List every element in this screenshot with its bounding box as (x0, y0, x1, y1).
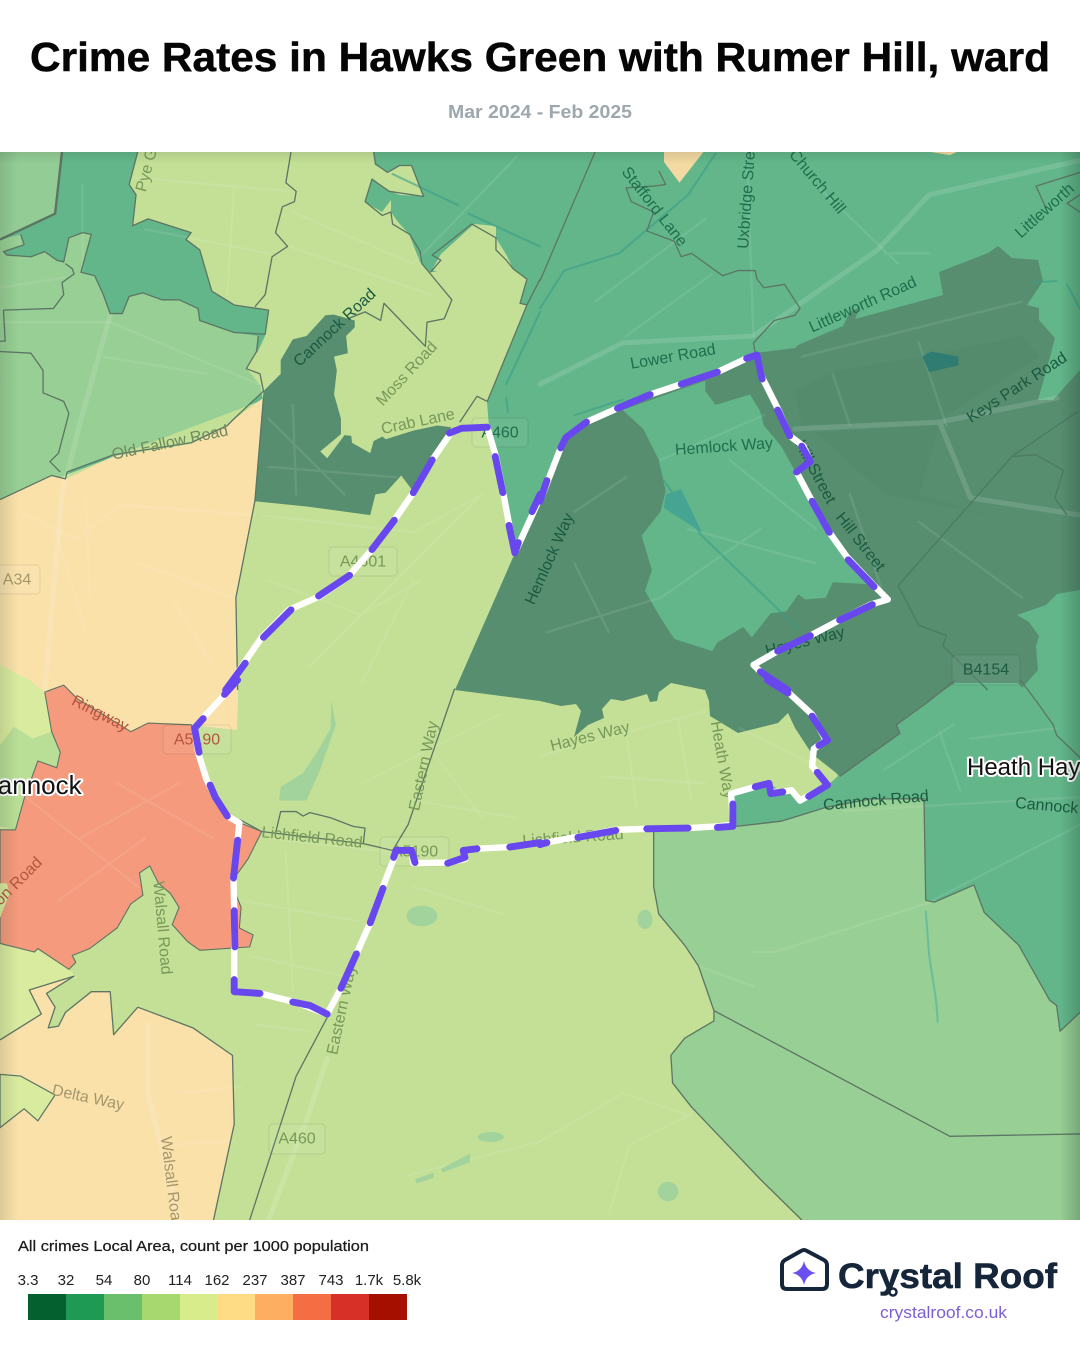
legend scale values: 114 (168, 1272, 192, 1289)
region: peach west (0, 398, 263, 732)
road labels: Stafford Lane (618, 164, 690, 250)
road labels: Cannock Road (823, 788, 929, 814)
road labels: Hill Street (832, 509, 888, 575)
road labels: Moss Road (373, 339, 441, 409)
legend scale values: 743 (318, 1272, 344, 1289)
region: dark green east (455, 246, 1080, 776)
road labels: Delta Way (50, 1082, 126, 1114)
region: dark green north west of ward (255, 315, 451, 515)
region: peach slivers at the top (664, 152, 957, 183)
legend colour bar (28, 1294, 407, 1320)
logo y-tail dot (890, 1288, 896, 1296)
road labels: Heath Way (707, 720, 737, 800)
road shield: A460 south: A460 (278, 1130, 316, 1148)
legend scale values: 162 (204, 1272, 230, 1289)
legend scale values: 5.8k (393, 1272, 422, 1289)
legend heading: All crimes Local Area, count per 1000 population (18, 1239, 369, 1255)
streets (0, 150, 1080, 1220)
road labels: Ringway (69, 692, 131, 736)
logo: Crystal Roof (782, 1250, 1057, 1322)
road shield: A4601: A4601 (340, 554, 386, 570)
region: pale green west of Cannock (0, 664, 51, 830)
road shield: A5190 centre (380, 837, 449, 866)
legend scale values: 3.3 (18, 1272, 38, 1289)
road labels: Hayes Way (549, 719, 631, 755)
road labels: Uxbridge Stre (735, 151, 759, 249)
road shield: A5190 centre: A5190 (392, 844, 438, 860)
road labels: Littleworth (1012, 180, 1078, 242)
road labels: Hemlock Way (674, 435, 774, 459)
legend scale values: 237 (242, 1272, 268, 1289)
region boundary lines (0, 152, 1080, 1220)
road shield: A460 north: A460 (481, 424, 519, 442)
water features (279, 153, 1080, 1201)
road labels: Hayes Way (764, 624, 846, 660)
road labels: Hemlock Way (522, 511, 578, 607)
road shield: A4601 (329, 547, 397, 576)
road shield: A5190 west: A5190 (174, 732, 220, 748)
road labels: Walsall Road (149, 881, 175, 975)
icon: house with star (782, 1250, 827, 1289)
road shield: A5190 west (163, 725, 231, 754)
region: salmon town centre (0, 685, 262, 969)
legend scale values: 80 (134, 1272, 150, 1289)
region: top left light green (0, 150, 62, 240)
legend scale values: 32 (58, 1272, 74, 1289)
subtitle: date range: Mar 2024 - Feb 2025 (448, 102, 632, 122)
region: south east light green (654, 799, 1080, 1220)
road shield: A34: A34 (3, 572, 31, 588)
legend scale values: 387 (280, 1272, 306, 1289)
road labels: Pye G (133, 146, 161, 194)
region: small inset by Avon Road (0, 883, 10, 918)
legend (18, 1239, 422, 1320)
road labels: Lichfield Road (261, 824, 363, 852)
region: pale green inlet near Delta Way (0, 1074, 55, 1128)
road labels: Crab Lane (380, 406, 456, 438)
map base: mid green area (0, 152, 1080, 1030)
road labels: Eastern Way (324, 964, 360, 1056)
road labels: Cannock Road (290, 286, 380, 370)
road labels: Littleworth Road (807, 274, 919, 336)
region: peach south west (0, 976, 234, 1220)
road labels: Old Fallow Road (110, 422, 230, 464)
website link: crystalroof.co.uk (880, 1304, 1008, 1322)
region: Hemlock Way mid green interior (623, 381, 876, 651)
road shield: B4154 (952, 655, 1020, 685)
road labels: Eastern Way (406, 720, 442, 812)
road labels: Lichfield Road (522, 826, 624, 850)
title: Crime Rates in Hawks Green with Rumer Hill, ward (30, 34, 1050, 80)
road labels: Church Hill (785, 147, 849, 217)
region: pale green south of Cannock (0, 942, 77, 1042)
road shield: A34 (0, 565, 40, 594)
road labels: Lower Road (629, 341, 717, 373)
region: large yellow-green area (0, 152, 838, 1220)
legend scale values: 54 (96, 1272, 112, 1289)
road labels: Hill Street (791, 437, 839, 507)
road shield: A460 north (472, 418, 528, 447)
map edge vignette (0, 152, 1080, 1220)
road shield: A460 south (269, 1124, 325, 1154)
region: west light green (0, 233, 263, 500)
road labels: Keys Park Road (964, 349, 1070, 427)
region: green pocket near Cannock (0, 726, 60, 830)
logo wordmark: Crystal Roof (838, 1257, 1057, 1296)
legend scale values: 1.7k (355, 1272, 384, 1289)
dark green shaded blocks (795, 336, 1039, 515)
legend scale values (18, 1272, 422, 1289)
ward boundary: white base line (195, 355, 888, 1014)
ward boundary: purple dashes (195, 355, 874, 1014)
road labels: Walsall Road (157, 1135, 185, 1231)
road shield: B4154: B4154 (963, 662, 1009, 678)
